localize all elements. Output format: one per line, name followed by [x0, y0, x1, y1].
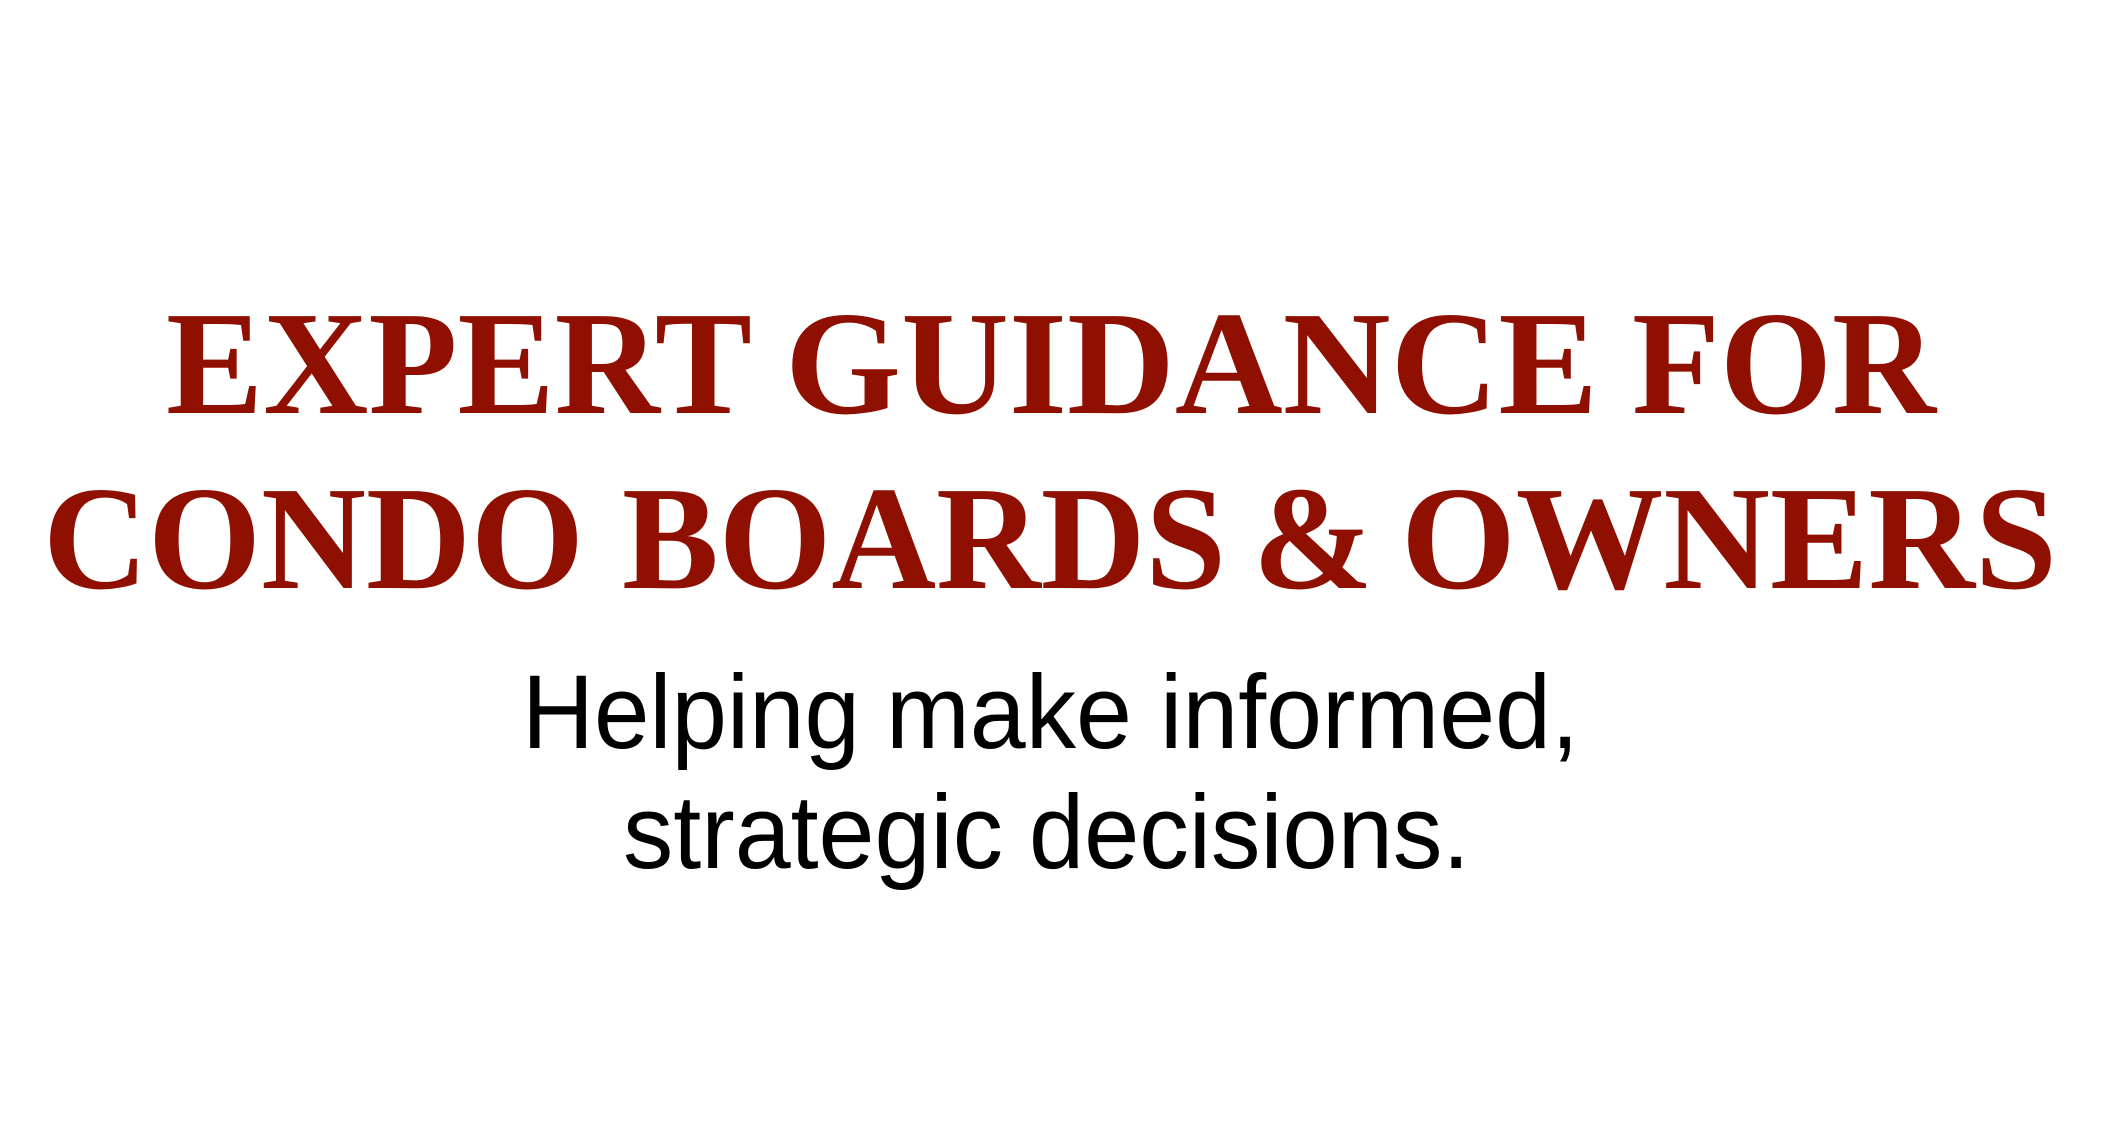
title: FOR — [1632, 282, 1938, 446]
title: EXPERT — [166, 282, 752, 446]
title — [43, 282, 2057, 621]
title: GUIDANCE — [785, 282, 1598, 446]
subtitle: informed, — [1160, 654, 1579, 771]
subtitle: Helping — [522, 654, 860, 771]
subtitle — [522, 654, 1579, 891]
title: OWNERS — [1401, 457, 2057, 621]
title: BOARDS — [622, 457, 1226, 621]
subtitle: make — [886, 654, 1132, 771]
subtitle: strategic — [623, 774, 1003, 891]
title: CONDO — [43, 457, 584, 621]
title: & — [1253, 457, 1373, 621]
subtitle: decisions. — [1029, 774, 1470, 891]
